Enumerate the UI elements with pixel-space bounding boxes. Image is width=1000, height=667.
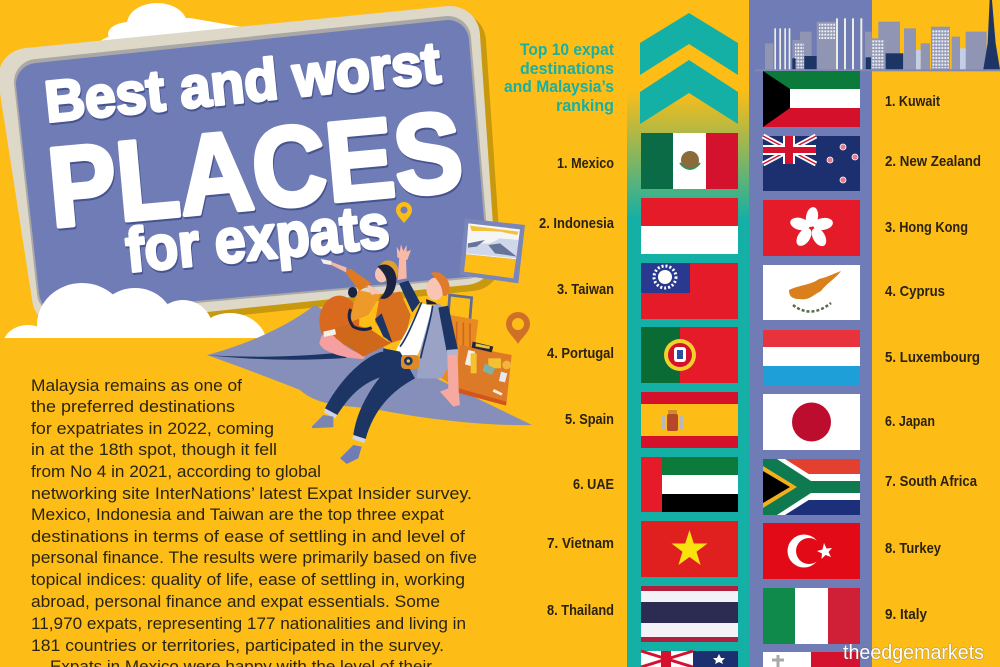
right labels: 2. New Zealand — [885, 153, 981, 170]
title — [42, 30, 467, 286]
body text: networking site InterNations’ latest Expat Insider survey. — [31, 484, 472, 503]
left labels: 4. Portugal — [547, 345, 614, 362]
left labels: 2. Indonesia — [539, 215, 615, 232]
skyline — [755, 0, 1000, 71]
left labels: 7. Vietnam — [547, 535, 614, 552]
icon: up chevrons — [640, 13, 738, 124]
flag: Spain — [641, 392, 738, 448]
panel: teal column — [627, 90, 749, 667]
body text: Malaysia remains as one of — [31, 376, 242, 395]
flag: Thailand — [641, 586, 738, 642]
icon: orange pin — [506, 312, 530, 344]
right labels: 6. Japan — [885, 413, 935, 430]
title: Best and worst — [42, 30, 443, 135]
flag: Vietnam — [641, 521, 738, 577]
icon: photo card — [459, 218, 525, 283]
icon: yellow pin — [396, 202, 412, 223]
sign frame — [28, 36, 465, 297]
right labels: 4. Cyprus — [885, 283, 945, 300]
body text: from No 4 in 2021, according to global — [31, 462, 321, 481]
flag: South Africa — [763, 459, 860, 515]
heading: top 10: and Malaysia’s — [504, 77, 614, 96]
body text: Mexico, Indonesia and Taiwan are the top three expat — [31, 505, 444, 524]
heading: top 10: Top 10 expat — [520, 40, 614, 59]
flag: Cyprus — [763, 265, 860, 320]
body text: the preferred destinations — [31, 397, 235, 416]
body text: destinations in terms of ease of settling in and level of — [31, 527, 465, 546]
right labels: 9. Italy — [885, 606, 928, 623]
illustration: travellers — [312, 244, 512, 464]
flag: Kuwait — [763, 71, 860, 127]
left labels: 3. Taiwan — [557, 281, 614, 298]
body text: 11,970 expats, representing 177 nationalities and living in — [31, 614, 466, 633]
flag: Italy — [763, 588, 860, 644]
watermark: theedgemarkets — [843, 641, 984, 664]
right labels: 7. South Africa — [885, 473, 978, 490]
woman — [319, 244, 411, 359]
body text: for expatriates in 2022, coming — [31, 419, 274, 438]
icon: bottom cloud — [4, 283, 265, 338]
body text — [31, 376, 477, 667]
body text: in at the 18th spot, though it fell — [31, 440, 277, 459]
suitcase brown — [453, 342, 512, 406]
flag: Turkey — [763, 523, 860, 579]
heading: top 10 — [504, 40, 614, 115]
flag: Luxembourg — [763, 330, 860, 385]
left labels: 5. Spain — [565, 411, 614, 428]
body text: 181 countries or territories, participated in the survey. — [31, 636, 444, 655]
flag: Taiwan — [641, 263, 738, 319]
paper plane — [207, 305, 532, 425]
sign face — [37, 41, 466, 292]
flag: Japan — [763, 394, 860, 450]
flag: Mexico — [641, 133, 738, 189]
title: PLACES — [43, 88, 467, 251]
left labels: 6. UAE — [573, 476, 614, 493]
icon: top cloud — [98, 3, 242, 50]
suitcase upright — [432, 295, 478, 388]
body text: abroad, personal finance and expat essentials. Some — [31, 592, 440, 611]
flag: Indonesia — [641, 198, 738, 254]
flag: Hong Kong — [763, 200, 860, 256]
right labels: 1. Kuwait — [885, 93, 940, 110]
heading: top 10: ranking — [556, 96, 614, 115]
sign inner rim — [37, 39, 466, 292]
flag: Australia — [641, 651, 738, 667]
right labels: 3. Hong Kong — [885, 219, 968, 236]
man — [312, 272, 460, 464]
flag: Malta — [763, 652, 860, 667]
body text: topical indices: quality of life, ease of settling in, working — [31, 570, 465, 589]
flag: New Zealand — [763, 136, 860, 191]
title: for expats — [123, 192, 392, 286]
right labels — [885, 93, 981, 623]
left labels — [539, 155, 615, 619]
flag: UAE — [641, 457, 738, 512]
right labels: 5. Luxembourg — [885, 349, 980, 366]
right labels: 8. Turkey — [885, 540, 942, 557]
left labels: 1. Mexico — [557, 155, 614, 172]
heading: top 10: destinations — [520, 59, 614, 78]
flag: Portugal — [641, 327, 738, 383]
panel: lavender column — [749, 0, 872, 667]
sign shadow — [34, 42, 471, 303]
body text: personal finance. The results were primarily based on five — [31, 548, 477, 567]
sign — [28, 36, 471, 303]
left labels: 8. Thailand — [547, 602, 614, 619]
plane fold — [207, 352, 346, 360]
